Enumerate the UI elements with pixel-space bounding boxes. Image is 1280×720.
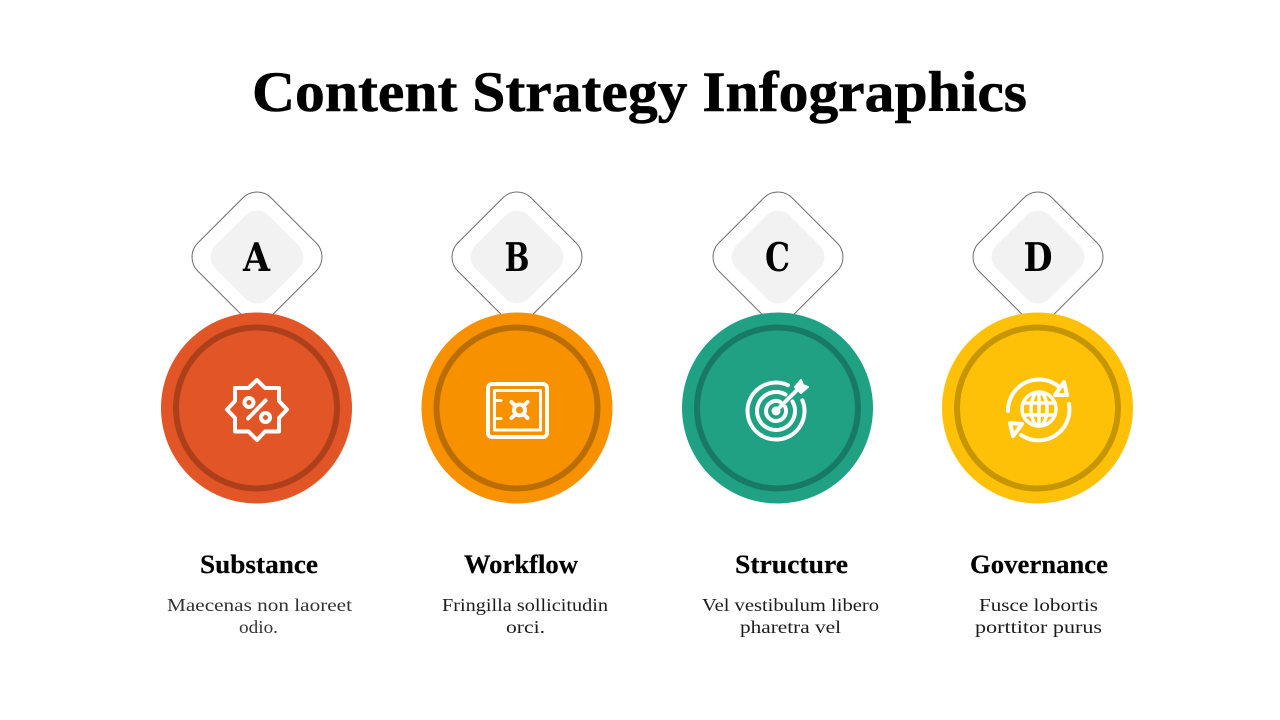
- diamond badge C: C: [765, 235, 790, 281]
- icon: target: [748, 380, 808, 440]
- diamond badge D: D: [1024, 235, 1052, 281]
- diamond badge B: B: [504, 235, 530, 281]
- text: Substance description: odio.: [239, 617, 278, 637]
- icon: rotating globe: [1008, 379, 1069, 440]
- panel: Governance: [942, 184, 1133, 637]
- circle C: [682, 312, 873, 504]
- panel: Substance: [161, 184, 352, 637]
- text: Structure description: Vel vestibulum libero: [702, 595, 879, 615]
- diamond badge B: [444, 184, 590, 330]
- diamond badge C: [705, 184, 851, 330]
- diamond badge A: A: [242, 235, 271, 281]
- diamond badge D: [965, 184, 1111, 330]
- panel: Workflow: [422, 184, 612, 637]
- circle A: [161, 312, 352, 504]
- text: Governance description: [975, 595, 1102, 637]
- heading: Governance: Governance: [970, 550, 1108, 579]
- text: Workflow description: orci.: [506, 617, 545, 637]
- heading: Workflow: Workflow: [464, 550, 578, 579]
- text: Substance description: [167, 595, 352, 637]
- icon: percent badge: [227, 380, 287, 440]
- diamond badge A: [184, 184, 330, 330]
- circle B: [422, 312, 612, 504]
- text: Workflow description: Fringilla sollicitudin: [442, 595, 608, 615]
- text: Structure description: pharetra vel: [740, 617, 841, 637]
- circle D: [942, 312, 1133, 504]
- text: Governance description: Fusce lobortis: [979, 595, 1098, 615]
- icon: safe: [488, 384, 547, 437]
- title: Content Strategy Infographics: [252, 61, 1027, 124]
- heading: Substance: Substance: [200, 550, 318, 579]
- text: Structure description: [702, 595, 879, 637]
- text: Governance description: porttitor purus: [975, 617, 1102, 637]
- text: Workflow description: [442, 595, 608, 637]
- panel: Structure: [682, 184, 879, 637]
- heading: Structure: Structure: [735, 550, 848, 579]
- text: Substance description: Maecenas non laoreet: [167, 595, 352, 615]
